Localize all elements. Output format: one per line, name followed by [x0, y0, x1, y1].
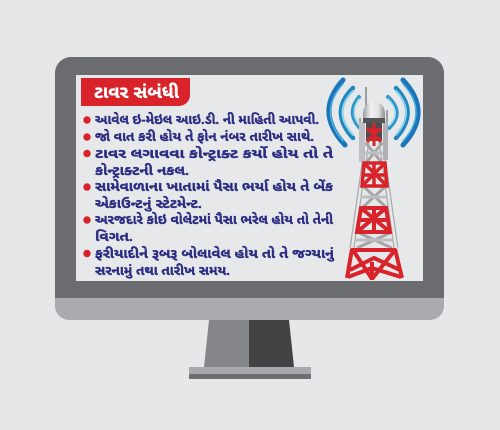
antenna dome — [359, 102, 388, 162]
tower white lattice — [352, 142, 396, 248]
screen panel — [76, 75, 423, 281]
item 6: ફરીયાદીને રૂબરૂ બોલાવેલ હોય તો તે જગ્યાનું — [95, 245, 335, 262]
bullet list — [83, 111, 335, 279]
icon: telecom tower — [347, 87, 402, 280]
icon: signal waves — [329, 80, 418, 145]
item 3: ટાવર લગાવવા કોન્ટ્રાક્ટ કર્યો હોય તો તે — [95, 145, 334, 162]
item 4: સામેવાળાના ખાતામાં પૈસા ભર્યા હોય તે બેંક — [95, 178, 333, 194]
item 3 — [83, 145, 334, 179]
item 6: સરનામું તથા તારીખ સમય. — [95, 263, 230, 279]
item 4 — [83, 178, 333, 212]
item 5: અરજદારે કોઇ વોલેટમાં પૈસા ભરેલ હોય તો તેની — [95, 211, 333, 227]
heading: tower related: ટાવર સંબંધી — [94, 83, 179, 102]
item 5: વિગત. — [95, 229, 133, 244]
red lattice sections — [347, 123, 402, 280]
item 1: આવેલ ઇ-મેઇલ આઇ.ડી. ની માહિતી આપવી. — [95, 111, 319, 127]
monitor body — [55, 57, 444, 320]
monitor stand — [189, 320, 311, 379]
item 2: જો વાત કરી હોય તે ફોન નંબર તારીખ સાથે. — [95, 128, 314, 144]
item 5 — [83, 211, 333, 244]
heading: tower related — [81, 78, 190, 106]
item 4: એકાઉન્ટનું સ્ટેટમેન્ટ. — [95, 195, 202, 212]
item 6 — [83, 245, 335, 279]
antenna masts — [360, 87, 387, 160]
item 3: કોન્ટ્રાક્ટની નકલ. — [95, 163, 189, 179]
